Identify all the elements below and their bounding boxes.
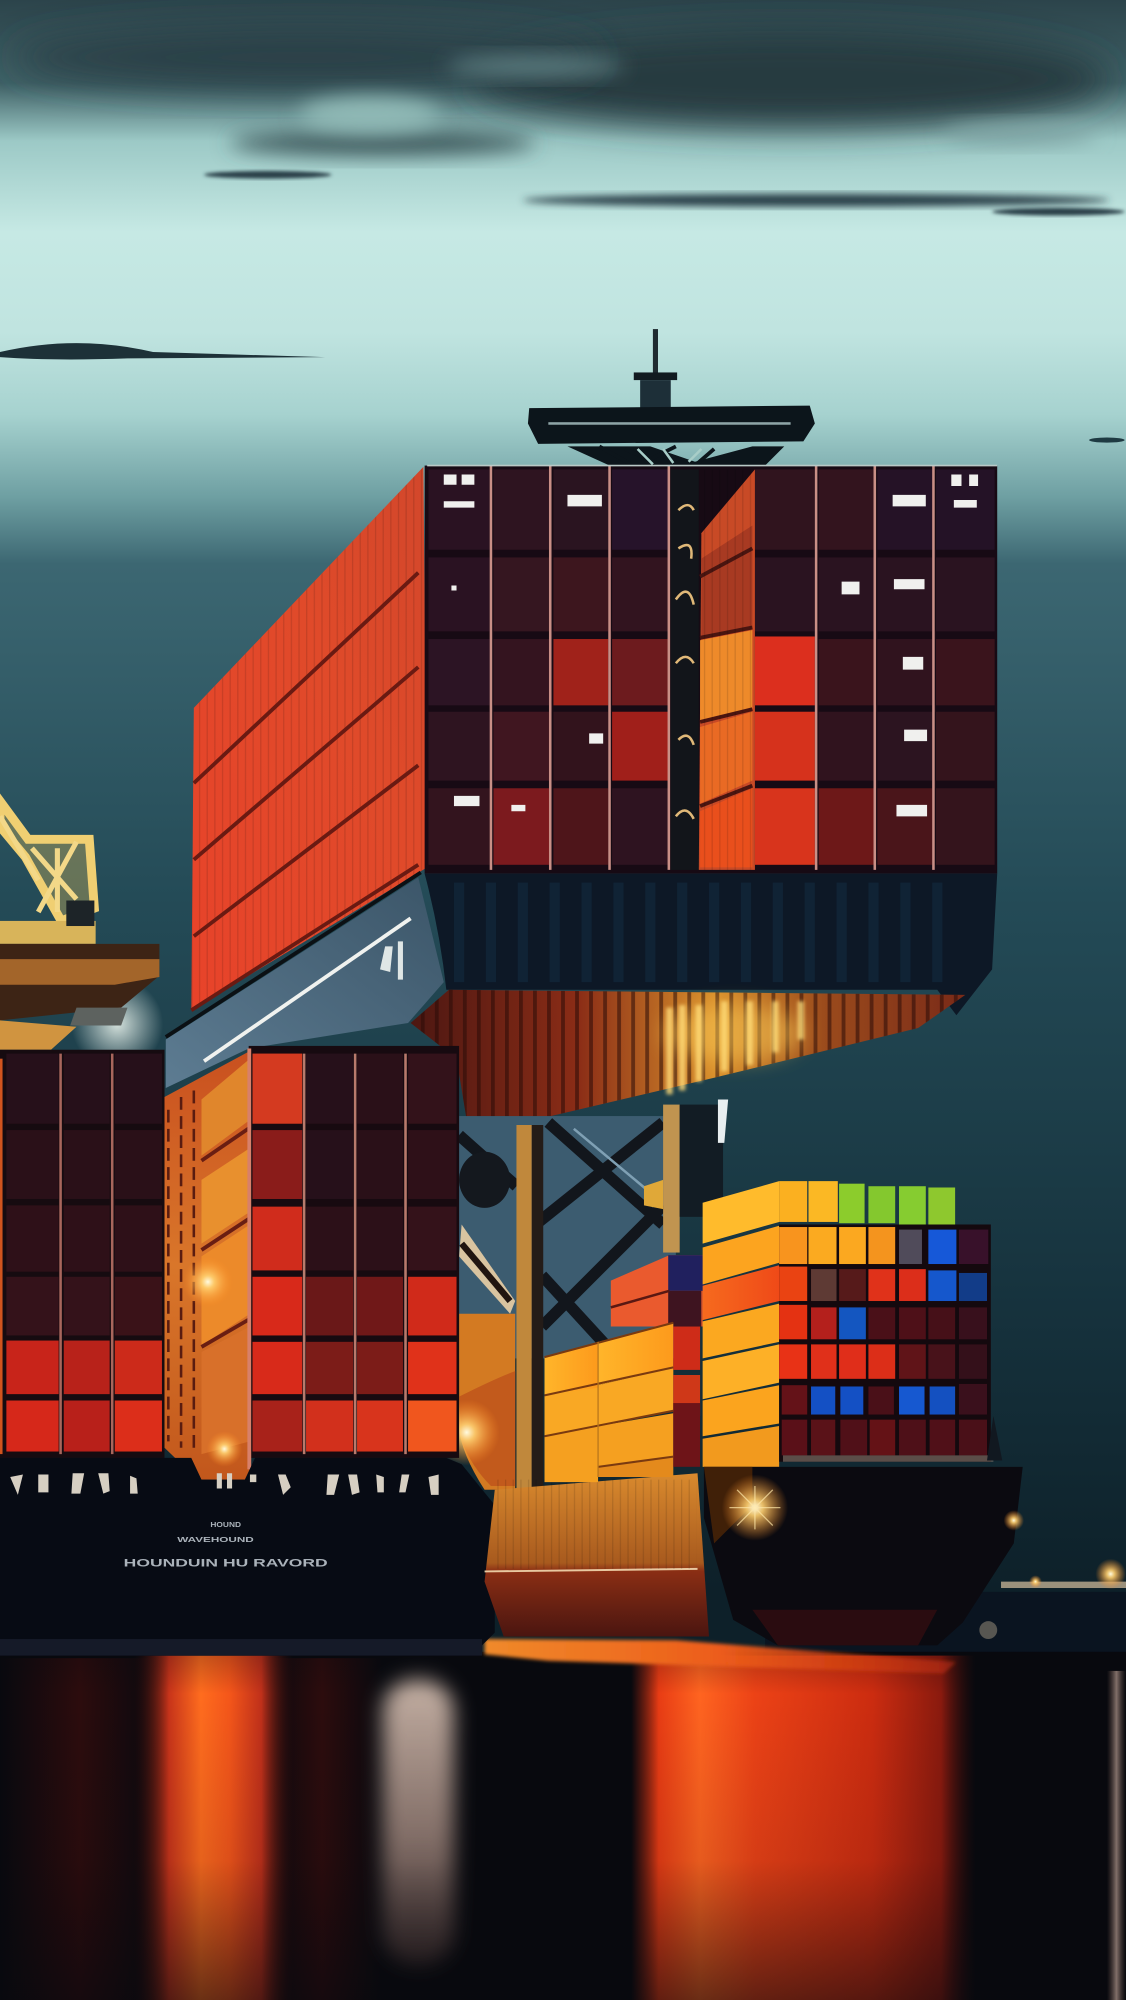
orange glowing bulkhead: [434, 1314, 515, 1490]
right container stack: colored grid: [779, 1181, 1002, 1462]
support pillars: [516, 1099, 728, 1489]
underside orange slats: [411, 990, 965, 1135]
middle orange hull: [485, 1473, 709, 1636]
hull lettering: HOUNDUIN HU RAVORD: [124, 1557, 328, 1569]
blue-grey bow wedge: [166, 872, 444, 1088]
mid container stack: [545, 1255, 704, 1482]
hull lettering: WAVEHOUND: [177, 1535, 254, 1544]
left container stack, dark: [0, 1050, 165, 1458]
top bridge with mast: [528, 329, 815, 466]
hull lettering: HOUND: [210, 1520, 242, 1529]
right container stack: side: [703, 1181, 779, 1467]
distant shore lights: [1001, 1559, 1126, 1589]
upper container stack: side: [191, 467, 427, 1010]
navy overhang hull: [425, 874, 997, 1015]
middle-left stack: patterned side: [165, 1051, 250, 1480]
upper stack: inner orange side: [699, 469, 755, 870]
upper container stack: front: [425, 466, 997, 874]
tower between stacks: [671, 469, 699, 870]
water with reflections: [0, 1592, 1126, 2000]
clouds: [0, 27, 1125, 443]
steel struts: [459, 1116, 676, 1358]
middle-left stack: front: [247, 1046, 459, 1469]
right hull: [704, 1467, 1023, 1645]
hull lettering: [124, 1520, 328, 1569]
left hull: [0, 1458, 495, 1656]
port lights and starbursts: [207, 1431, 1024, 1639]
crane, left background: [0, 801, 163, 1070]
